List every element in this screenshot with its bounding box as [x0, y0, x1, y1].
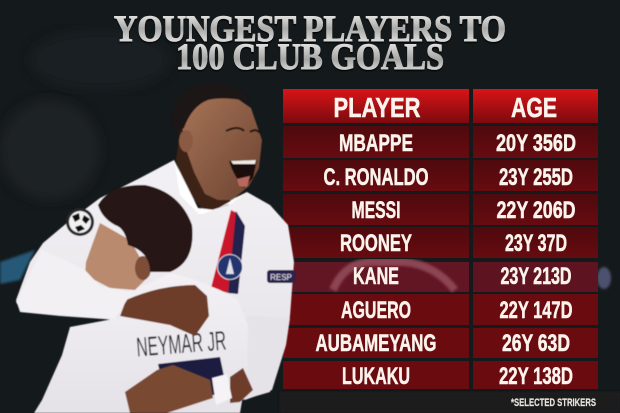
- row: Messi: MESSI: [352, 197, 400, 224]
- table: [283, 89, 598, 390]
- row: Rooney: ROONEY: [340, 230, 412, 257]
- header: player: PLAYER: [334, 92, 420, 123]
- title: 100 CLUB GOALS: [176, 37, 444, 78]
- hair: [98, 185, 193, 272]
- forearm: [230, 368, 253, 403]
- sleeve over arm: [16, 250, 132, 319]
- row: Aubameyang: 26Y 63D: [502, 330, 570, 357]
- row: Kane: 23Y 213D: [500, 263, 572, 290]
- header: player: [283, 89, 469, 123]
- row: Lukaku: 22Y 138D: [499, 363, 573, 390]
- row: Mbappe: 20Y 356D: [496, 130, 576, 157]
- head: [180, 95, 262, 200]
- header: age: AGE: [511, 92, 557, 123]
- title: YOUNGEST PLAYERS TO: [114, 9, 506, 50]
- row: Lukaku: LUKAKU: [342, 363, 410, 390]
- collar: [174, 160, 247, 215]
- row: Aguero: 22Y 147D: [500, 297, 572, 324]
- player: Mbappe: [16, 83, 295, 400]
- player: Neymar: [16, 185, 253, 413]
- star ball badge: [66, 208, 94, 236]
- neck: [176, 130, 240, 212]
- body: [34, 273, 248, 413]
- row: Messi: 22Y 206D: [496, 197, 576, 224]
- hair: [172, 83, 251, 134]
- row: C. Ronaldo: [283, 160, 598, 191]
- row: Messi: [283, 194, 598, 225]
- title: [114, 9, 506, 78]
- row: C. Ronaldo: 23Y 255D: [499, 164, 573, 191]
- respect badge: RESP: [270, 273, 292, 282]
- row: Mbappe: MBAPPE: [339, 130, 413, 157]
- row: Mbappe: [283, 126, 598, 158]
- wristband: [212, 374, 232, 405]
- eyes: [226, 128, 260, 133]
- row: Rooney: 23Y 37D: [505, 230, 567, 257]
- mouth: [229, 160, 257, 188]
- arm and hand on shoulder: [120, 285, 209, 336]
- ear: [179, 130, 193, 152]
- shirt number: [158, 357, 224, 395]
- respect badge: [267, 270, 295, 283]
- face: [85, 223, 150, 290]
- row: Aubameyang: [283, 328, 598, 358]
- row: Kane: KANE: [353, 263, 399, 290]
- row: Aguero: AGUERO: [341, 297, 411, 324]
- players photo: [16, 83, 295, 413]
- row: Lukaku: [283, 361, 598, 390]
- header: age: [473, 89, 598, 123]
- body: [16, 160, 294, 400]
- hand on back: [125, 365, 213, 413]
- shirt stripe: [211, 210, 237, 293]
- ear: [135, 256, 151, 280]
- row: Aguero: [283, 294, 598, 325]
- row: C. Ronaldo: C. RONALDO: [324, 164, 428, 191]
- row: Kane: [283, 262, 598, 292]
- PSG crest: [218, 254, 242, 280]
- name on shirt: NEYMAR JR: [135, 326, 227, 363]
- row: Rooney: [283, 227, 598, 258]
- row: Aubameyang: AUBAMEYANG: [316, 330, 436, 357]
